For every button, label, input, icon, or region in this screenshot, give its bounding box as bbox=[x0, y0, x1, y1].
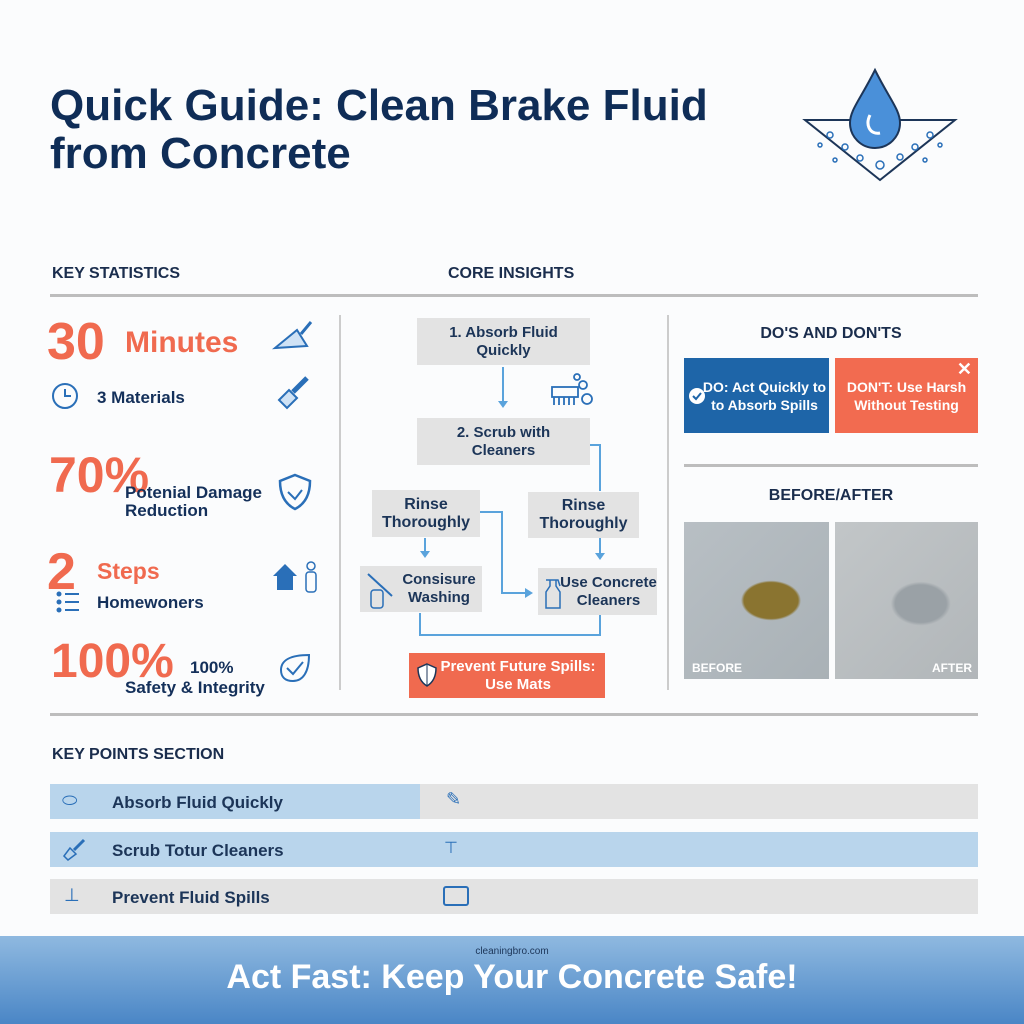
image: after bbox=[835, 522, 978, 679]
callout: prevent future spills: Prevent Future Spills: bbox=[440, 658, 596, 674]
panel: core insights flowchart bbox=[360, 318, 657, 698]
step 2: 2. Scrub with bbox=[457, 424, 550, 440]
icon: shield bbox=[278, 474, 312, 510]
panel: key statistics: 100% bbox=[190, 658, 233, 677]
use concrete cleaners bbox=[538, 568, 657, 615]
footer banner: Act Fast: Keep Your Concrete Safe! bbox=[226, 958, 798, 996]
panel: key statistics: Steps bbox=[97, 558, 160, 584]
key point 3: Prevent Fluid Spills bbox=[112, 888, 270, 907]
panel: key statistics: Potenial Damage bbox=[125, 483, 262, 502]
title: from Concrete bbox=[50, 129, 351, 178]
callout: prevent future spills: Use Mats bbox=[485, 676, 551, 692]
stat: 70%: 70% bbox=[49, 447, 149, 503]
do box: DO: Act Quickly to bbox=[703, 378, 826, 394]
title bbox=[50, 81, 708, 178]
panel: key statistics: Minutes bbox=[125, 326, 238, 359]
dont box: DON'T: Use Harsh bbox=[847, 378, 966, 394]
key point 1 bbox=[50, 784, 978, 819]
do box: to Absorb Spills bbox=[711, 396, 818, 412]
do box bbox=[684, 358, 829, 433]
rinse left: Thoroughly bbox=[382, 514, 470, 530]
dont box: Without Testing bbox=[854, 396, 959, 412]
footer banner bbox=[0, 936, 1024, 1024]
heading: core insights: CORE INSIGHTS bbox=[448, 265, 574, 282]
image: after: AFTER bbox=[932, 661, 972, 675]
stat: 2 steps: 2 bbox=[47, 543, 76, 601]
image: before: BEFORE bbox=[692, 661, 742, 675]
rinse right: Rinse bbox=[562, 497, 605, 514]
key point 2 bbox=[50, 832, 978, 867]
use concrete cleaners: Cleaners bbox=[577, 592, 640, 608]
rinse right: Thoroughly bbox=[540, 515, 627, 532]
icon: drop on concrete bbox=[802, 68, 958, 182]
dont box: ✕ bbox=[957, 359, 972, 379]
image: before bbox=[684, 522, 829, 679]
stat: 3 materials: 3 Materials bbox=[97, 388, 185, 407]
stat: 30 minutes: 30 bbox=[47, 313, 105, 371]
heading: before/after: BEFORE/AFTER bbox=[769, 487, 893, 504]
icon: list bbox=[56, 592, 79, 612]
step 1 bbox=[417, 318, 590, 365]
heading: key points: KEY POINTS SECTION bbox=[52, 746, 224, 763]
consisure washing bbox=[360, 566, 482, 612]
key point 2: Scrub Totur Cleaners bbox=[112, 841, 284, 860]
panel: key statistics bbox=[47, 313, 317, 697]
use concrete cleaners: Use Concrete bbox=[560, 574, 657, 590]
key point 2: ⊤ bbox=[444, 840, 458, 857]
panel: key statistics: Reduction bbox=[125, 501, 208, 520]
step 2: Cleaners bbox=[472, 442, 535, 458]
dont box bbox=[835, 358, 978, 433]
panel: key statistics: Homewoners bbox=[97, 593, 204, 612]
key point 3: ⊥ bbox=[64, 885, 80, 905]
stat: 100%: 100% bbox=[51, 635, 174, 688]
key point 3 bbox=[50, 879, 978, 914]
icon: scoop bbox=[272, 321, 312, 350]
title: Quick Guide: Clean Brake Fluid bbox=[50, 81, 708, 130]
icon: check leaf bbox=[280, 654, 310, 682]
consisure washing: Consisure bbox=[402, 571, 476, 588]
key point 1: ✎ bbox=[446, 789, 461, 809]
heading: dos and donts: DO'S AND DON'TS bbox=[760, 325, 902, 342]
icon: brush bbox=[278, 376, 309, 410]
key point 1: Absorb Fluid Quickly bbox=[112, 793, 283, 812]
consisure washing: Washing bbox=[408, 589, 470, 606]
icon: house and person bbox=[273, 561, 317, 593]
rinse right bbox=[528, 492, 639, 538]
key point 1: ⬭ bbox=[62, 790, 77, 810]
panel: key statistics: Safety & Integrity bbox=[125, 678, 265, 697]
rinse left: Rinse bbox=[404, 496, 448, 512]
connectors bbox=[419, 367, 605, 636]
rinse left bbox=[372, 490, 480, 537]
step 1: 1. Absorb Fluid bbox=[449, 324, 558, 340]
step 1: Quickly bbox=[476, 342, 531, 358]
icon: clock bbox=[52, 383, 78, 409]
step 2 bbox=[417, 418, 590, 465]
icon: scrub brush bbox=[552, 374, 592, 405]
heading: key statistics: KEY STATISTICS bbox=[52, 265, 180, 282]
callout: prevent future spills bbox=[409, 653, 605, 698]
footer banner: cleaningbro.com bbox=[475, 946, 549, 957]
